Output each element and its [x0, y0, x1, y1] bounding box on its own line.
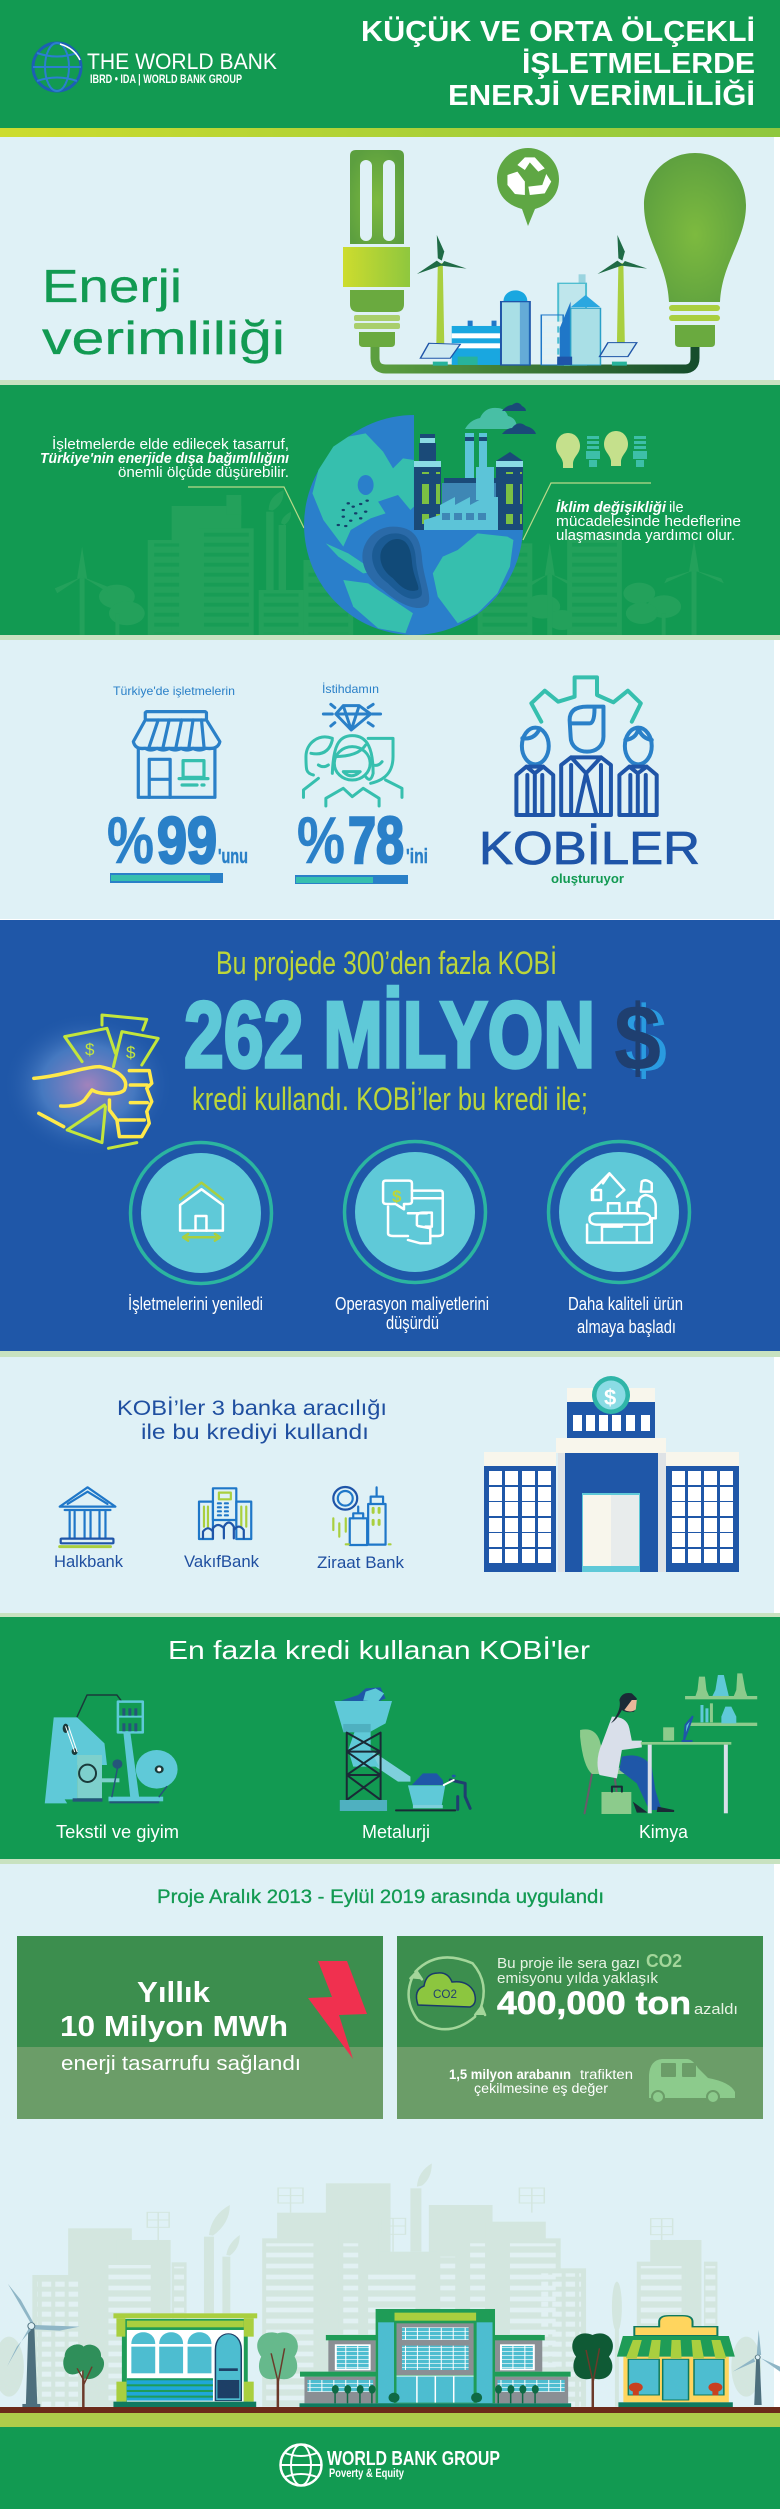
- item: renewed businesses: [128, 1142, 272, 1314]
- illustration: textile machine: [45, 1695, 178, 1803]
- text: climate: mücadelesinde hedeflerine: [556, 514, 741, 530]
- label: renewed: İşletmelerini yeniledi: [128, 1294, 263, 1314]
- panel: partner banks: [0, 1357, 774, 1613]
- icon: payment screen: [383, 1181, 443, 1243]
- decorative strip: [0, 380, 780, 385]
- text: savings: önemli ölçüde düşürebilir.: [118, 465, 289, 481]
- heading: Enerji verimliliği: verimliliği: [42, 312, 285, 364]
- icon: dollar coin: $: [604, 1385, 616, 1410]
- text: savings: [40, 435, 289, 481]
- decorative strip: [0, 635, 780, 640]
- leader line: right: [523, 483, 651, 540]
- icon: neon hand with cash: $: [85, 1040, 95, 1059]
- heading: Enerji verimliliği: [42, 260, 285, 364]
- icon: World Bank globe logo: [33, 43, 81, 91]
- faint city background: [55, 490, 724, 635]
- stat: 99 percent: 99: [157, 803, 217, 877]
- icon: CO2 cycle: [409, 1957, 485, 2029]
- illustration: chemist in lab: [580, 1673, 757, 1814]
- footer logo text: WORLD BANK GROUP: [327, 2448, 500, 2470]
- panel: energy efficiency hero: [0, 137, 774, 380]
- building: right shop: [617, 2316, 735, 2407]
- panel: header: [0, 0, 780, 137]
- icon: Halkbank: [60, 1487, 115, 1547]
- title: [361, 15, 755, 112]
- label: share of businesses: Türkiye'de işletmelerin: [113, 684, 235, 698]
- icon: compact fluorescent lamp: [343, 150, 410, 347]
- label: employment: İstihdamın: [322, 682, 379, 696]
- icon: dollar sign: $: [620, 987, 667, 1092]
- label: reduced: azaldı: [694, 2001, 738, 2018]
- heading: project dates: Proje Aralık 2013 - Eylül 2019 arasında uygulandı: [157, 1887, 604, 1908]
- building: left shop: [113, 2313, 257, 2407]
- label: Ziraat Bank: Ziraat Bank: [317, 1553, 404, 1572]
- text: climate: ile: [669, 500, 684, 516]
- progress bar: 78 percent: [295, 875, 408, 884]
- panel: top sectors: [0, 1617, 780, 1859]
- icon: Ziraat Bank: [333, 1487, 391, 1545]
- icon: diamond and people: [303, 704, 402, 806]
- panel: globe and benefits: [0, 385, 780, 635]
- label: better quality: [568, 1294, 683, 1337]
- card: CO2 reduction: [397, 1936, 763, 2119]
- stat: annual savings: 10 Milyon MWh: [60, 2011, 288, 2043]
- icon: green light bulb: [644, 153, 746, 347]
- illustration: globe with factory: [304, 403, 536, 635]
- stat: 99 percent: [107, 803, 248, 877]
- icon: house: [180, 1183, 223, 1241]
- icon: SME team with gear: [516, 677, 657, 815]
- text: greenhouse gas: emisyonu yılda yaklaşık: [497, 1970, 659, 1987]
- label: lower costs: [335, 1294, 489, 1333]
- panel: project results: [0, 1864, 774, 2407]
- title: ENERJİ VERİMLİLİĞİ: [448, 78, 755, 112]
- icon: wind turbine left: [7, 2284, 80, 2407]
- illustration: metallurgy hopper and worker: [334, 1687, 470, 1811]
- item: lower costs: [335, 1142, 489, 1333]
- icon: neon hand with cash: $: [126, 1043, 136, 1062]
- panel: SME statistics: [0, 640, 774, 919]
- text: cars equivalent: çekilmesine eş değer: [474, 2081, 609, 2096]
- text: climate: ulaşmasında yardımcı olur.: [556, 528, 735, 544]
- stat: 78 percent: 78: [348, 803, 404, 877]
- icon: lightning bolt: [308, 1961, 367, 2059]
- building: central office: [299, 2309, 571, 2407]
- panel: footer: [0, 2427, 780, 2509]
- stat: 78 percent: [297, 803, 428, 877]
- label: textile: Tekstil ve giyim: [56, 1822, 179, 1842]
- text: savings: İşletmelerde elde edilecek tasarruf,: [52, 435, 289, 453]
- icon: wire connecting lamps: [375, 347, 695, 369]
- logo text: The World Bank: THE WORLD BANK: [87, 49, 277, 74]
- heading: Enerji verimliliği: Enerji: [42, 260, 182, 312]
- text: project intro: Bu projede 300’den fazla KOBİ: [216, 945, 557, 981]
- icon: robot arm and conveyor: [587, 1173, 656, 1243]
- icon: clouds: [465, 403, 536, 434]
- stat: annual savings: [60, 1977, 288, 2043]
- icon: bulbs row: [556, 431, 647, 468]
- stat: 262 million: 262 MİLYON: [184, 982, 595, 1087]
- label: metallurgy: Metalurji: [362, 1822, 430, 1842]
- text: cars equivalent: [449, 2067, 633, 2096]
- label: lower costs: düşürdü: [386, 1313, 439, 1333]
- stat: 400,000 tons: 400,000 ton: [497, 1985, 691, 2021]
- stat: 78 percent: 'ini: [406, 846, 428, 868]
- icon: factory: [414, 433, 523, 530]
- text: greenhouse gas: [497, 1955, 659, 1987]
- label: better quality: almaya başladı: [577, 1317, 676, 1337]
- decorative strip: [0, 1351, 780, 1357]
- label: KOBİLER: KOBİLER: [479, 822, 700, 874]
- label: better quality: Daha kaliteli ürün: [568, 1294, 683, 1314]
- illustration: bank building: [484, 1376, 739, 1572]
- heading: three banks: KOBİ’ler 3 banka aracılığı: [117, 1397, 387, 1420]
- icon: CO2 cycle: CO2: [433, 1987, 457, 2001]
- icon: dark spill on globe: [337, 499, 429, 608]
- icon: trees: [63, 2332, 613, 2407]
- card: energy savings: [17, 1936, 383, 2119]
- icon: footer globe logo: [280, 2444, 322, 2486]
- heading: three banks: ile bu krediyi kullandı: [141, 1421, 369, 1444]
- illustration: green city with wind turbines: [417, 235, 647, 366]
- leader line: left: [188, 487, 304, 528]
- text: credit used: kredi kullandı. KOBİ’ler bu kredi ile;: [192, 1081, 588, 1117]
- stat: 99 percent: 'unu: [218, 846, 248, 868]
- icon: car: [649, 2059, 735, 2103]
- progress bar: 99 percent: [110, 873, 223, 883]
- label: chemistry: Kimya: [639, 1822, 689, 1842]
- footer subtext: Poverty & Equity: [329, 2466, 404, 2480]
- icon: wind turbine right: [733, 2330, 780, 2405]
- label: CO2: CO2: [646, 1951, 682, 1971]
- label: oluşturuyor: oluşturuyor: [551, 871, 624, 886]
- stat: 99 percent: %: [107, 803, 154, 877]
- heading: three banks: [117, 1397, 387, 1444]
- icon: VakıfBank: [199, 1488, 251, 1539]
- label: VakıfBank: VakıfBank: [184, 1552, 259, 1571]
- text: cars equivalent: trafikten: [580, 2067, 633, 2082]
- text: climate: [556, 499, 741, 544]
- decorative strip: [0, 1859, 780, 1864]
- panel: loan amount: [0, 920, 780, 1351]
- icon: neon hand with cash: [3, 1013, 173, 1157]
- icon: dollar sign: $: [614, 985, 661, 1090]
- item: better quality: [548, 1142, 690, 1337]
- logo subtext: IBRD • IDA | WORLD BANK GROUP: [90, 74, 242, 86]
- label: dollar in bubble: $: [392, 1187, 402, 1206]
- text: cars equivalent: 1,5 milyon arabanın: [449, 2067, 571, 2082]
- text: greenhouse gas: Bu proje ile sera gazı: [497, 1955, 640, 1972]
- label: Halkbank: Halkbank: [54, 1552, 123, 1571]
- icon: shop: [133, 712, 220, 797]
- stat: annual savings: Yıllık: [137, 1977, 211, 2009]
- title: KÜÇÜK VE ORTA ÖLÇEKLİ: [361, 15, 755, 48]
- title: İŞLETMELERDE: [522, 48, 755, 80]
- label: lower costs: Operasyon maliyetlerini: [335, 1294, 489, 1314]
- text: savings: Türkiye'nin enerjide dışa bağımlılığını: [40, 451, 289, 467]
- label: energy saved: enerji tasarrufu sağlandı: [61, 2053, 301, 2075]
- heading: top SMEs: En fazla kredi kullanan KOBİ'ler: [168, 1635, 590, 1665]
- illustration: street of buildings: [7, 2284, 780, 2407]
- decorative strip: [0, 1613, 780, 1617]
- icon: dollar coin: [592, 1376, 630, 1414]
- faint city skyline: [0, 2163, 761, 2407]
- stat: 78 percent: %: [297, 803, 345, 877]
- ground: [0, 2407, 780, 2427]
- text: climate: İklim değişikliği: [556, 499, 667, 516]
- icon: recycling bubble: [497, 148, 559, 226]
